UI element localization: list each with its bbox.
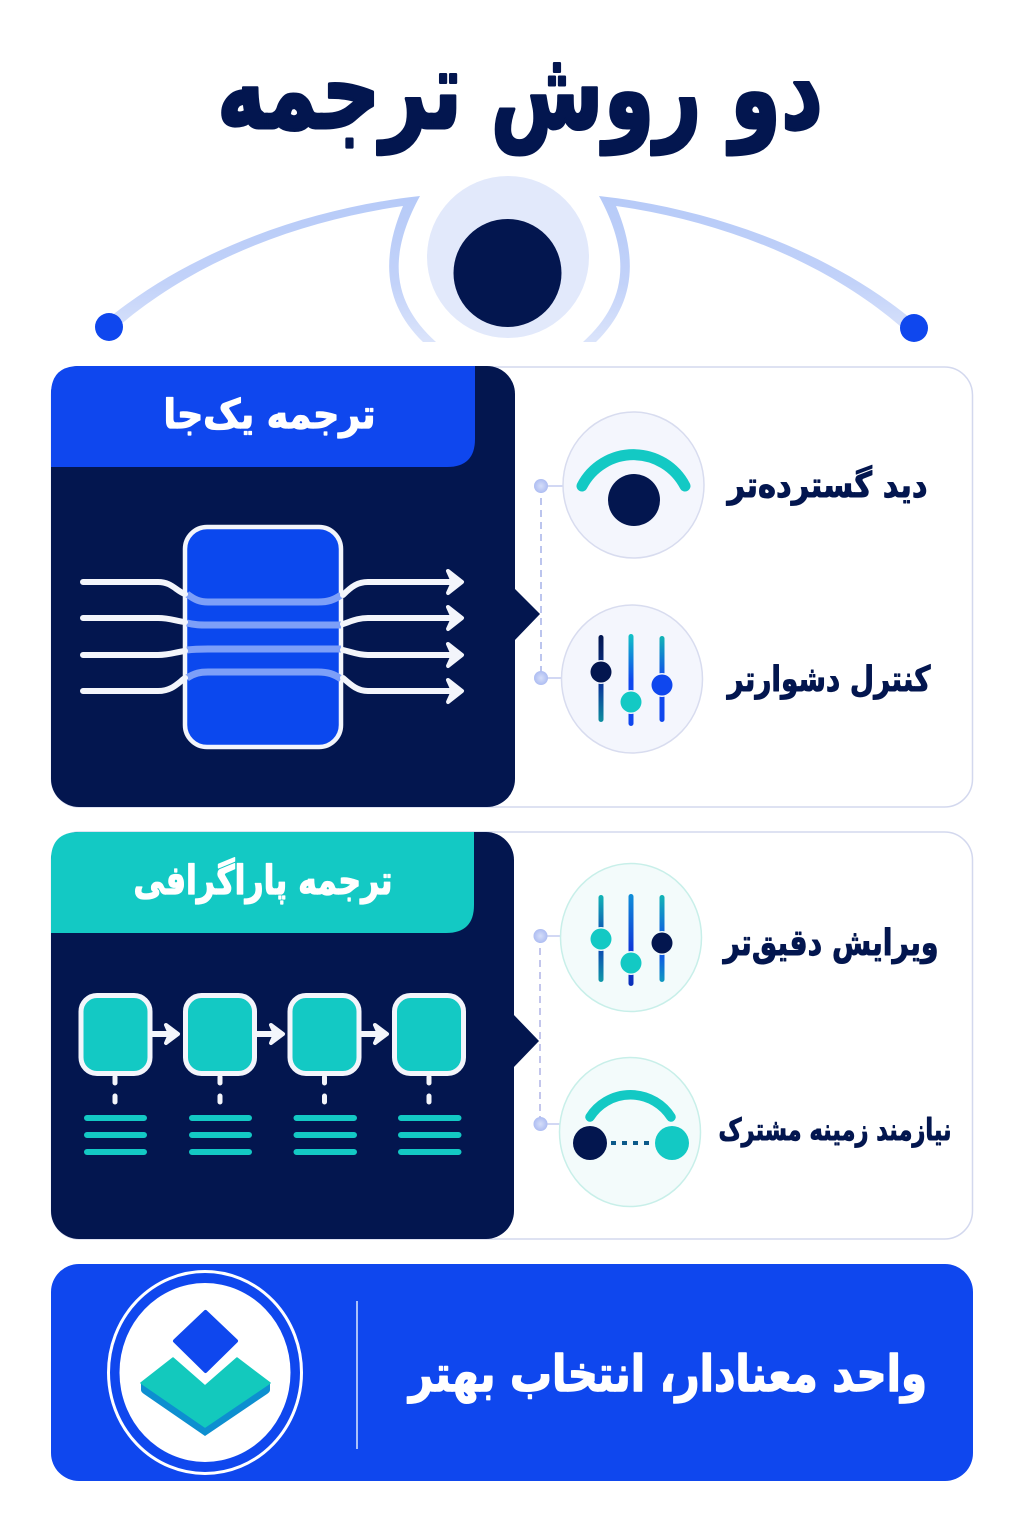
step arrows bbox=[151, 1031, 381, 1037]
banner divider bbox=[356, 1301, 358, 1449]
input lines bbox=[83, 582, 185, 691]
connector bbox=[534, 479, 563, 685]
pupil bbox=[454, 219, 562, 327]
icon: shared context bbox=[560, 1058, 700, 1206]
panel: one-piece translation bbox=[51, 366, 972, 807]
label: precise editing: ویرایش دقیق‌تر bbox=[722, 923, 938, 964]
icon: harder control sliders bbox=[562, 605, 702, 753]
header: one-piece translation: ترجمه یک‌جا bbox=[164, 392, 376, 438]
output arrows bbox=[343, 582, 455, 691]
title: دو روش ترجمه bbox=[217, 26, 823, 155]
label: needs shared context: نیازمند زمینه مشترک bbox=[718, 1113, 952, 1148]
teal header tab bbox=[51, 832, 474, 933]
eye illustration bbox=[95, 176, 928, 342]
right eyelid arc bbox=[583, 196, 915, 342]
dark panel pointer bbox=[513, 1014, 539, 1068]
block bbox=[185, 527, 341, 747]
dark panel pointer bbox=[514, 588, 540, 641]
panel outline bbox=[52, 367, 972, 807]
right end dot bbox=[900, 314, 928, 342]
paragraph flow diagram bbox=[81, 996, 464, 1152]
blue header tab bbox=[51, 366, 475, 467]
inner lines bbox=[187, 594, 341, 679]
label: wider view: دید گسترده‌تر bbox=[726, 465, 928, 506]
conclusion banner bbox=[51, 1264, 973, 1481]
panel outline bbox=[52, 832, 972, 1239]
dark panel bbox=[51, 366, 515, 807]
left eyelid arc bbox=[104, 196, 436, 342]
dark panel bbox=[51, 832, 514, 1239]
step arrow heads bbox=[166, 1025, 387, 1043]
arrow heads bbox=[448, 571, 462, 702]
dashed stems bbox=[115, 1077, 429, 1102]
icon: precise editing sliders bbox=[560, 864, 702, 1012]
banner background bbox=[51, 1264, 973, 1481]
iris halo bbox=[427, 176, 589, 338]
banner text: واحد معنادار، انتخاب بهتر bbox=[406, 1345, 927, 1404]
icon: wider view bbox=[563, 412, 704, 558]
text lines bbox=[87, 1118, 458, 1152]
label: harder control: کنترل دشوارتر bbox=[726, 660, 931, 700]
icon: layered diamond badge bbox=[108, 1272, 302, 1474]
panel: paragraph translation bbox=[51, 832, 972, 1239]
connector bbox=[534, 929, 561, 1131]
central block with lines passing through bbox=[83, 527, 462, 747]
left end dot bbox=[95, 313, 123, 341]
header: paragraph translation: ترجمه پاراگرافی bbox=[134, 857, 392, 904]
paragraph blocks bbox=[81, 996, 464, 1074]
